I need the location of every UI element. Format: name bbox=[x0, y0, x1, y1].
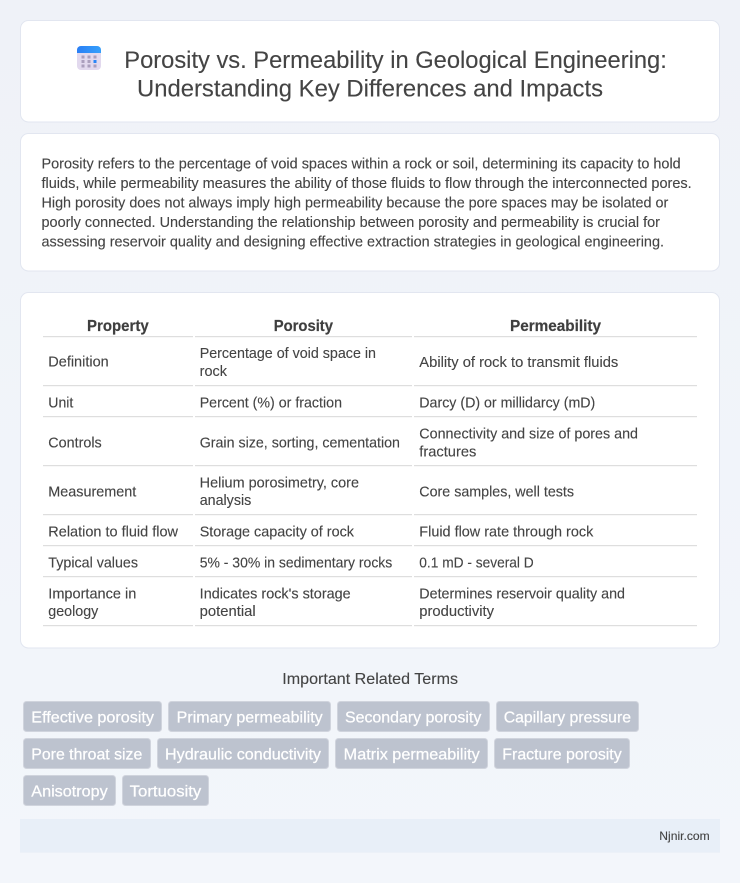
row: measurement: Helium porosimetry, core bbox=[200, 475, 359, 491]
footer bbox=[20, 819, 720, 853]
row: typical values bbox=[48, 555, 534, 571]
tag: hydraulic conductivity bbox=[158, 738, 328, 768]
text block: introduction paragraph: poorly connected. Understanding the relationship between porosity and permeability is crucial for bbox=[42, 215, 660, 231]
text block: introduction paragraph: Porosity refers to the percentage of void spaces within a rock or soil, determining its capacity to hold bbox=[42, 156, 681, 172]
row: importance in geology: Indicates rock's storage bbox=[200, 586, 351, 602]
tag: secondary porosity: Secondary porosity bbox=[345, 709, 481, 726]
tag: pore throat size: Pore throat size bbox=[31, 746, 142, 763]
tag: pore throat size bbox=[24, 738, 150, 768]
row: typical values: Typical values bbox=[48, 555, 138, 571]
row: definition bbox=[48, 346, 618, 380]
row: importance in geology: Determines reservoir quality and bbox=[419, 586, 625, 602]
tag: matrix permeability: Matrix permeability bbox=[344, 746, 480, 763]
row: measurement: Measurement bbox=[48, 484, 136, 500]
title bbox=[124, 47, 667, 102]
footer: Njnir.com bbox=[659, 829, 710, 843]
title: Porosity vs. Permeability in Geological Engineering: bbox=[124, 47, 667, 74]
table header row: Permeability bbox=[510, 318, 601, 335]
tag: anisotropy: Anisotropy bbox=[31, 783, 108, 800]
row: definition: Ability of rock to transmit fluids bbox=[419, 355, 618, 371]
row: importance in geology: geology bbox=[48, 604, 99, 620]
title: Understanding Key Differences and Impacts bbox=[137, 76, 603, 102]
tag: tortuosity bbox=[122, 776, 208, 806]
row: unit: Unit bbox=[48, 395, 73, 411]
tag: effective porosity bbox=[24, 702, 162, 732]
row: relation to fluid flow: Relation to fluid flow bbox=[48, 524, 179, 540]
tag list: related terms bbox=[24, 702, 638, 806]
tag: fracture porosity bbox=[494, 738, 630, 768]
tag: hydraulic conductivity: Hydraulic conductivity bbox=[165, 746, 321, 763]
row: typical values: 5% - 30% in sedimentary rocks bbox=[200, 555, 392, 571]
panel: introduction bbox=[20, 134, 720, 271]
row: controls: Controls bbox=[48, 435, 102, 451]
row: definition: Definition bbox=[48, 355, 109, 371]
row: measurement bbox=[48, 475, 574, 509]
table header row bbox=[87, 318, 601, 335]
row: controls bbox=[48, 427, 638, 460]
tag: effective porosity: Effective porosity bbox=[31, 709, 154, 726]
row: relation to fluid flow bbox=[48, 524, 594, 540]
row: unit: Percent (%) or fraction bbox=[200, 395, 342, 411]
row: measurement: analysis bbox=[200, 493, 251, 509]
tag: tortuosity: Tortuosity bbox=[130, 783, 201, 800]
tag: primary permeability bbox=[168, 702, 330, 732]
row: unit: Darcy (D) or millidarcy (mD) bbox=[419, 395, 595, 411]
row: measurement: Core samples, well tests bbox=[419, 484, 574, 500]
row: definition: Percentage of void space in bbox=[200, 346, 376, 362]
row: importance in geology: productivity bbox=[419, 604, 495, 620]
text block: introduction paragraph: fluids, while permeability measures the ability of those fluids to flow through the interconnected pores. bbox=[42, 176, 692, 192]
tag: anisotropy bbox=[24, 776, 116, 806]
tag: capillary pressure bbox=[496, 702, 638, 732]
row: importance in geology: potential bbox=[200, 604, 256, 620]
row: unit bbox=[48, 395, 595, 411]
row: relation to fluid flow: Fluid flow rate through rock bbox=[419, 524, 594, 540]
row: controls: fractures bbox=[419, 444, 476, 460]
table header row: Porosity bbox=[274, 318, 333, 335]
text block: introduction paragraph bbox=[42, 156, 692, 250]
panel: comparison table bbox=[20, 292, 720, 648]
panel: header card bbox=[20, 20, 720, 122]
table header row: Property bbox=[87, 318, 149, 335]
row: importance in geology bbox=[48, 586, 625, 620]
tag: fracture porosity: Fracture porosity bbox=[502, 746, 622, 763]
text block: introduction paragraph: High porosity does not always imply high permeability because the pore spaces may be isolated or bbox=[42, 195, 668, 211]
tag: secondary porosity bbox=[338, 702, 490, 732]
row: controls: Connectivity and size of pores and bbox=[419, 427, 638, 443]
row: controls: Grain size, sorting, cementation bbox=[200, 435, 400, 451]
icon: calendar bbox=[77, 46, 101, 70]
row: definition: rock bbox=[200, 364, 228, 380]
row: relation to fluid flow: Storage capacity of rock bbox=[200, 524, 355, 540]
heading: important related terms: Important Related Terms bbox=[282, 671, 458, 688]
tag: capillary pressure: Capillary pressure bbox=[504, 709, 631, 726]
text block: introduction paragraph: assessing reservoir quality and designing effective extraction strategies in geological engineering. bbox=[42, 234, 664, 250]
row: importance in geology: Importance in bbox=[48, 586, 136, 602]
row: typical values: 0.1 mD - several D bbox=[419, 555, 534, 571]
tag: primary permeability: Primary permeability bbox=[177, 709, 323, 726]
tag: matrix permeability bbox=[336, 738, 488, 768]
